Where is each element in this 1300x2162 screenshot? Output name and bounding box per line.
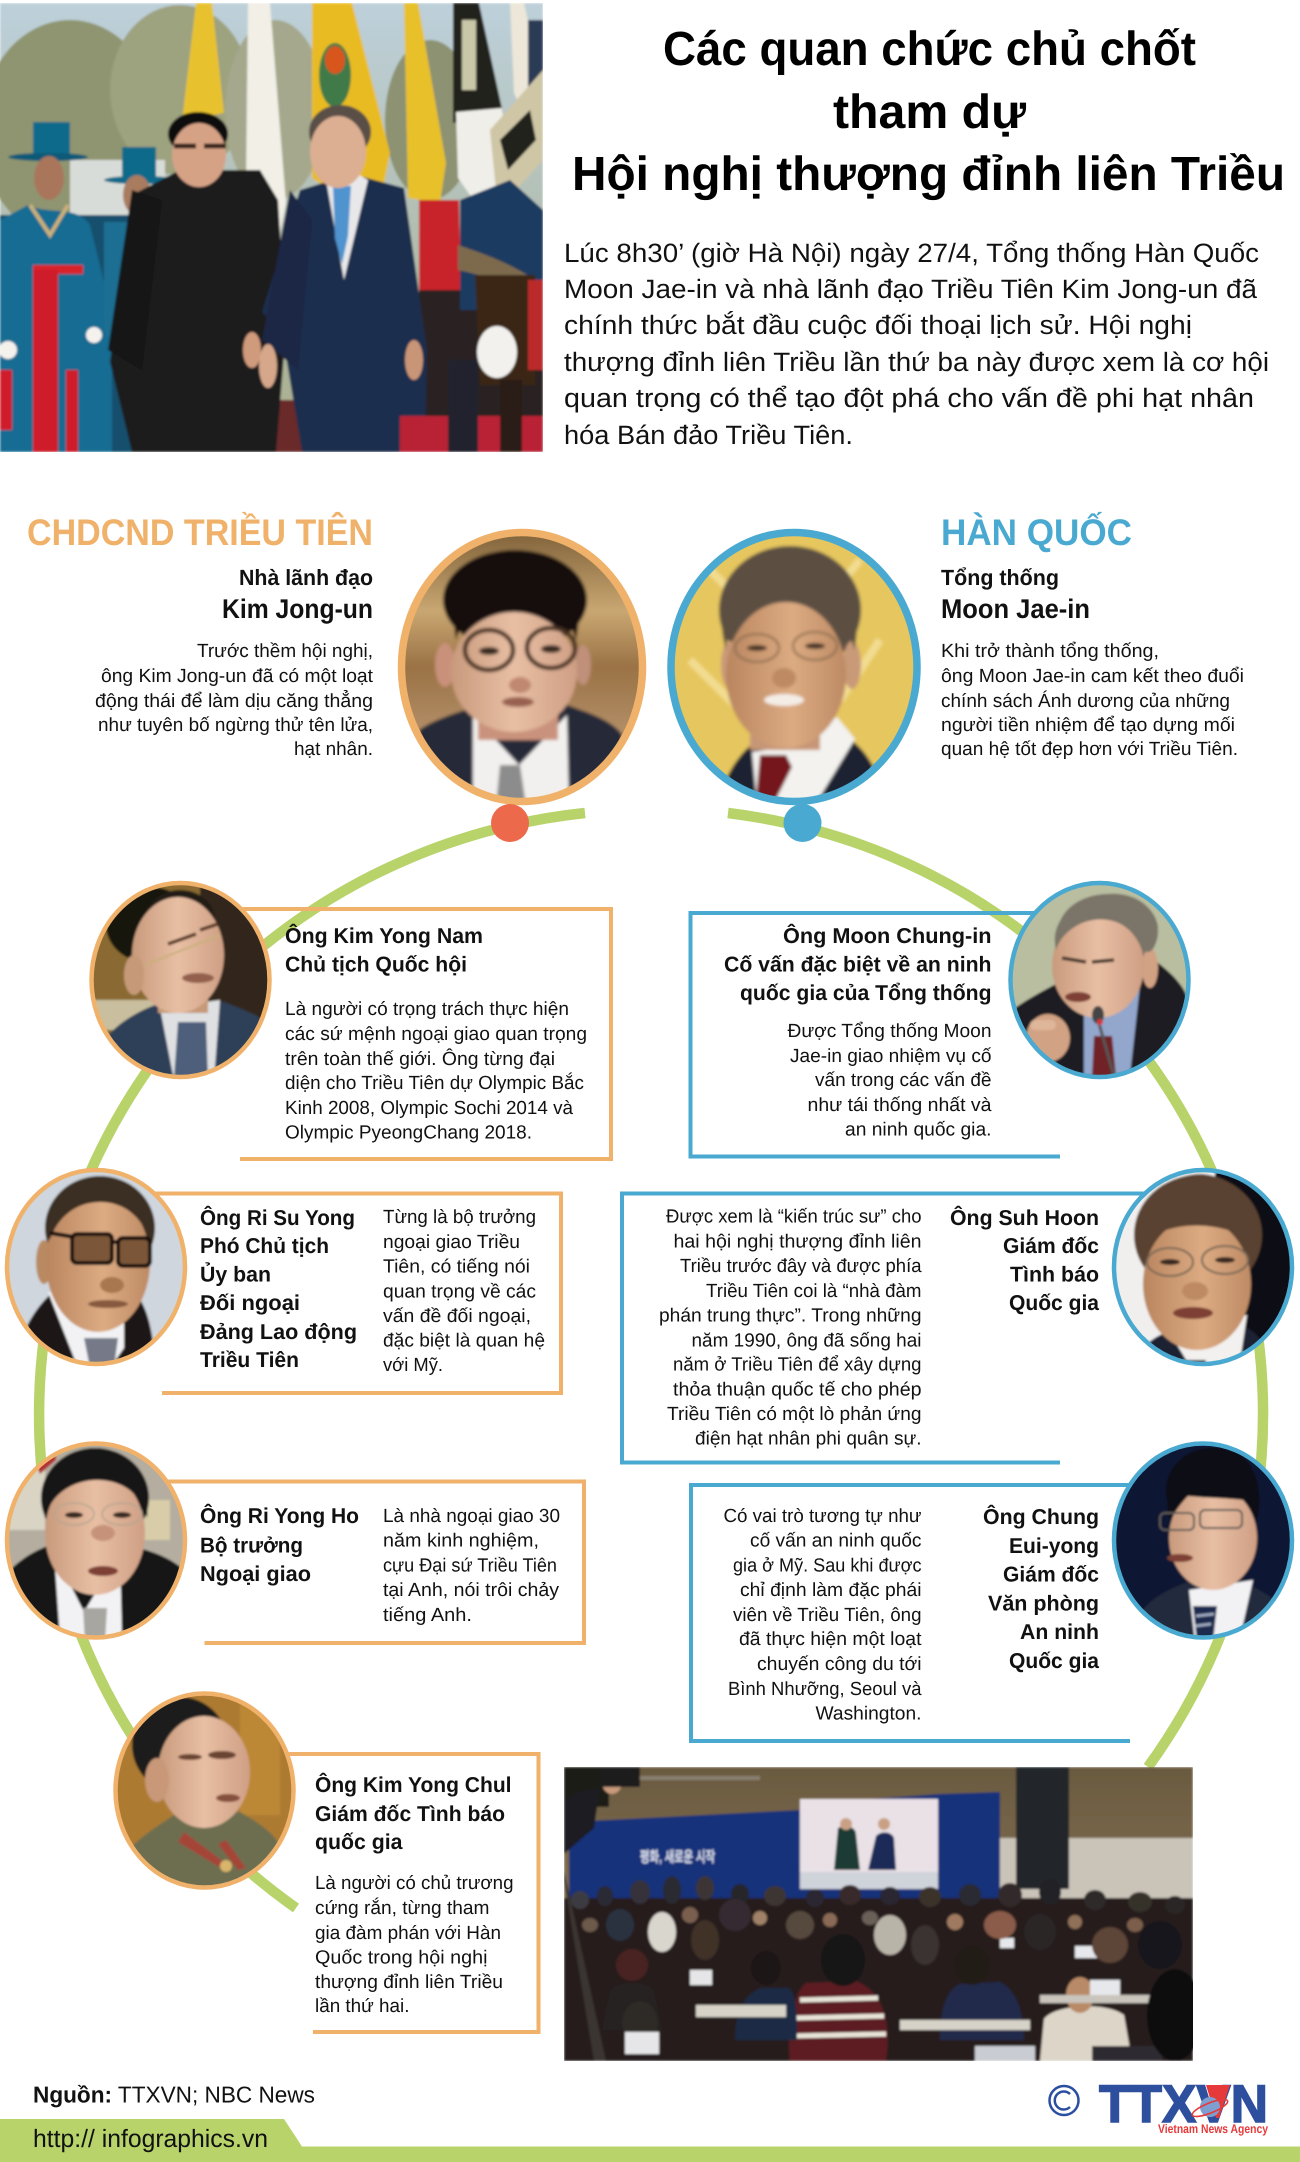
title: Hội nghị thượng đỉnh liên Triều (572, 148, 1285, 201)
footer website: http:// infographics.vn (33, 2125, 268, 2153)
name and title: Bộ trưởng (200, 1534, 303, 1558)
description: Là nhà ngoại giao 30 (383, 1506, 560, 1527)
description: điện hạt nhân phi quân sự. (695, 1428, 922, 1450)
panel: Moon Jae-in (666, 527, 1244, 807)
name and title: quốc gia (315, 1830, 404, 1854)
description (383, 1207, 545, 1376)
name and title: Ông Suh Hoon (950, 1205, 1099, 1230)
portrait: Kim Yong Nam (87, 879, 274, 1082)
portrait: Kim Jong-un (396, 527, 648, 807)
logo: TTXVN: TTXVN (1099, 2075, 1268, 2134)
panel: Ri Yong Ho (3, 1439, 584, 1643)
top photo: leaders walking with honour guard (0, 3, 543, 452)
footer band (0, 2119, 1300, 2162)
portrait: Chung Eui-yong (1110, 1439, 1297, 1643)
role and name: Tổng thống (941, 565, 1059, 590)
portrait: Ri Su Yong (3, 1166, 190, 1370)
heading: North Korea: CHDCND TRIỀU TIÊN (27, 511, 373, 553)
description (659, 1206, 922, 1450)
description (941, 641, 1244, 760)
name and title: Ông Ri Yong Ho (200, 1503, 359, 1528)
bottom photo: press centre: 평화, 새로운 시작 (640, 1849, 715, 1866)
description: ông Moon Jae-in cam kết theo đuổi (941, 666, 1244, 687)
name and title (724, 923, 992, 1005)
description: Có vai trò tương tự như (724, 1506, 922, 1527)
description: Triều trước đây và được phía (680, 1256, 922, 1277)
name and title: Eui-yong (1009, 1534, 1099, 1558)
description: Từng là bộ trưởng (383, 1207, 536, 1228)
description: với Mỹ. (383, 1355, 443, 1376)
description: gia đàm phán với Hàn (315, 1923, 501, 1944)
name and title: An ninh (1020, 1620, 1099, 1644)
description: gia ở Mỹ. Sau khi được (733, 1556, 922, 1576)
description: tiếng Anh. (383, 1605, 472, 1626)
description: Olympic PyeongChang 2018. (285, 1122, 532, 1144)
description: ông Kim Jong-un đã có một loạt (101, 666, 374, 687)
connecting green ring: left arc (39, 813, 585, 1908)
intro paragraph: Moon Jae-in và nhà lãnh đạo Triều Tiên Kim Jong-un đã (564, 274, 1257, 304)
panel: Kim Jong-un (95, 527, 648, 807)
marker: blue dot (784, 804, 822, 842)
description: viên về Triều Tiên, ông (733, 1605, 922, 1626)
description: trên toàn thế giới. Ông từng đại (285, 1048, 555, 1070)
title: tham dự (833, 86, 1026, 139)
portrait: Moon Jae-in (666, 527, 922, 807)
description: các sứ mệnh ngoại giao quan trọng (285, 1024, 587, 1045)
intro paragraph (564, 238, 1269, 450)
name and title: Ông Kim Yong Chul (315, 1772, 512, 1797)
description: Washington. (816, 1704, 922, 1724)
name and title: Phó Chủ tịch (200, 1234, 329, 1258)
bottom photo: press centre (564, 1767, 1203, 2061)
role and name: Moon Jae-in (941, 594, 1090, 624)
description: quan trọng về các (383, 1282, 536, 1302)
description: Triều Tiên có một lò phản ứng (667, 1404, 922, 1425)
name and title: Triều Tiên (200, 1348, 299, 1372)
description: chính sách Ánh dương của những (941, 690, 1230, 712)
heading: South Korea: HÀN QUỐC (941, 511, 1132, 553)
description: thượng đỉnh liên Triều (315, 1972, 503, 1993)
description: an ninh quốc gia. (845, 1120, 992, 1140)
description: Bình Nhưỡng, Seoul và (728, 1679, 922, 1700)
description: ngoại giao Triều (383, 1232, 520, 1253)
copyright symbol (1050, 2086, 1078, 2115)
logo: TTXVN: Vietnam News Agency (1158, 2122, 1268, 2136)
description: Trước thềm hội nghị, (197, 641, 373, 662)
name and title (200, 1205, 357, 1372)
panel: Kim Yong Chul (111, 1689, 538, 2032)
name and title: Đối ngoại (200, 1291, 300, 1315)
description: quan hệ tốt đẹp hơn với Triều Tiên. (941, 739, 1238, 760)
description (724, 1506, 922, 1724)
panel: Chung Eui-yong (691, 1439, 1297, 1741)
description (95, 641, 374, 760)
description: Là người có chủ trương (315, 1873, 514, 1894)
name and title: Đảng Lao động (200, 1320, 357, 1344)
name and title: Giám đốc (1003, 1562, 1099, 1586)
description: thỏa thuận quốc tế cho phép (673, 1380, 922, 1400)
description: năm ở Triều Tiên để xây dựng (673, 1354, 922, 1376)
description: lần thứ hai. (315, 1996, 410, 2017)
role and name: Kim Jong-un (222, 594, 373, 624)
description: chuyến công du tới (757, 1654, 922, 1675)
intro paragraph: chính thức bắt đầu cuộc đối thoại lịch sử. Hội nghị (564, 310, 1192, 340)
portrait: Ri Yong Ho (3, 1439, 190, 1643)
source line: Nguồn: TTXVN; NBC News (33, 2082, 315, 2108)
intro paragraph: thượng đỉnh liên Triều lần thứ ba này được xem là cơ hội (564, 347, 1269, 377)
role and name (941, 565, 1090, 624)
description: người tiền nhiệm để tạo dựng mối (941, 715, 1235, 736)
description: vấn đề đối ngoại, (383, 1306, 531, 1327)
marker: red dot (491, 804, 529, 842)
description: cựu Đại sứ Triều Tiên (383, 1556, 557, 1576)
name and title: Tình báo (1010, 1262, 1099, 1286)
description (315, 1873, 514, 2017)
description: cố vấn an ninh quốc (750, 1530, 922, 1552)
name and title: quốc gia của Tổng thống (740, 981, 992, 1005)
panel: Ri Su Yong (3, 1166, 561, 1393)
description: hai hội nghị thượng đỉnh liên (674, 1232, 922, 1252)
panel: Kim Yong Nam (87, 879, 611, 1159)
name and title: Ông Ri Su Yong (200, 1205, 355, 1230)
description (788, 1021, 992, 1140)
name and title: Ủy ban (200, 1262, 271, 1286)
description: Tiên, có tiếng nói (383, 1256, 530, 1278)
description: phán trung thực”. Trong những (659, 1306, 922, 1326)
intro paragraph: Lúc 8h30’ (giờ Hà Nội) ngày 27/4, Tổng thống Hàn Quốc (564, 238, 1259, 268)
description (285, 999, 587, 1144)
name and title: Ông Moon Chung-in (783, 923, 992, 948)
description: Được xem là “kiến trúc sư” cho (666, 1206, 922, 1228)
connecting green ring: right arc (728, 813, 1263, 1767)
name and title: Ông Kim Yong Nam (285, 923, 483, 948)
intro paragraph: hóa Bán đảo Triều Tiên. (564, 420, 853, 450)
name and title: Cố vấn đặc biệt về an ninh (724, 952, 992, 976)
description: năm 1990, ông đã sống hai (692, 1330, 922, 1352)
role and name (222, 565, 373, 624)
portrait: Moon Chung-in (1006, 879, 1193, 1084)
name and title (950, 1205, 1100, 1315)
portrait: Kim Yong Chul (111, 1689, 298, 1896)
panel: Moon Chung-in (690, 879, 1193, 1156)
name and title (285, 923, 483, 976)
name and title: Giám đốc Tình báo (315, 1802, 505, 1826)
description: Kinh 2008, Olympic Sochi 2014 và (285, 1098, 573, 1119)
description: như tái thống nhất và (808, 1095, 992, 1116)
description: cứng rắn, từng tham (315, 1897, 490, 1919)
description (383, 1506, 560, 1626)
description: đặc biệt là quan hệ (383, 1330, 545, 1352)
name and title (983, 1504, 1100, 1673)
name and title (200, 1503, 359, 1586)
name and title: Ngoại giao (200, 1562, 311, 1586)
panel: Suh Hoon (622, 1166, 1297, 1462)
description: Là người có trọng trách thực hiện (285, 999, 569, 1020)
description: Jae-in giao nhiệm vụ cố (790, 1046, 992, 1067)
name and title: Giám đốc (1003, 1234, 1099, 1258)
title (572, 23, 1285, 201)
description: như tuyên bố ngừng thử tên lửa, (98, 715, 373, 736)
description: Triều Tiên coi là “nhà đàm (706, 1281, 922, 1302)
description: diện cho Triều Tiên dự Olympic Bắc (285, 1072, 584, 1094)
description: vấn trong các vấn đề (815, 1070, 992, 1091)
description: chỉ định làm đặc phái (740, 1580, 922, 1601)
name and title: Ông Chung (983, 1504, 1099, 1529)
intro paragraph: quan trọng có thể tạo đột phá cho vấn đề phi hạt nhân (564, 383, 1254, 413)
description: năm kinh nghiệm, (383, 1530, 539, 1552)
role and name: Nhà lãnh đạo (239, 565, 373, 590)
portrait: Suh Hoon (1110, 1166, 1297, 1370)
description: tại Anh, nói trôi chảy (383, 1580, 560, 1601)
name and title: Quốc gia (1009, 1291, 1100, 1315)
name and title: Văn phòng (988, 1592, 1099, 1616)
name and title: Quốc gia (1009, 1649, 1100, 1673)
name and title (315, 1772, 512, 1854)
description: đã thực hiện một loạt (739, 1629, 922, 1650)
description: Được Tổng thống Moon (788, 1021, 992, 1042)
description: Quốc trong hội nghị (315, 1948, 488, 1968)
description: Khi trở thành tổng thống, (941, 641, 1159, 662)
description: hạt nhân. (294, 739, 373, 760)
title: Các quan chức chủ chốt (663, 23, 1196, 76)
description: động thái để làm dịu căng thẳng (95, 689, 373, 712)
name and title: Chủ tịch Quốc hội (285, 952, 467, 976)
